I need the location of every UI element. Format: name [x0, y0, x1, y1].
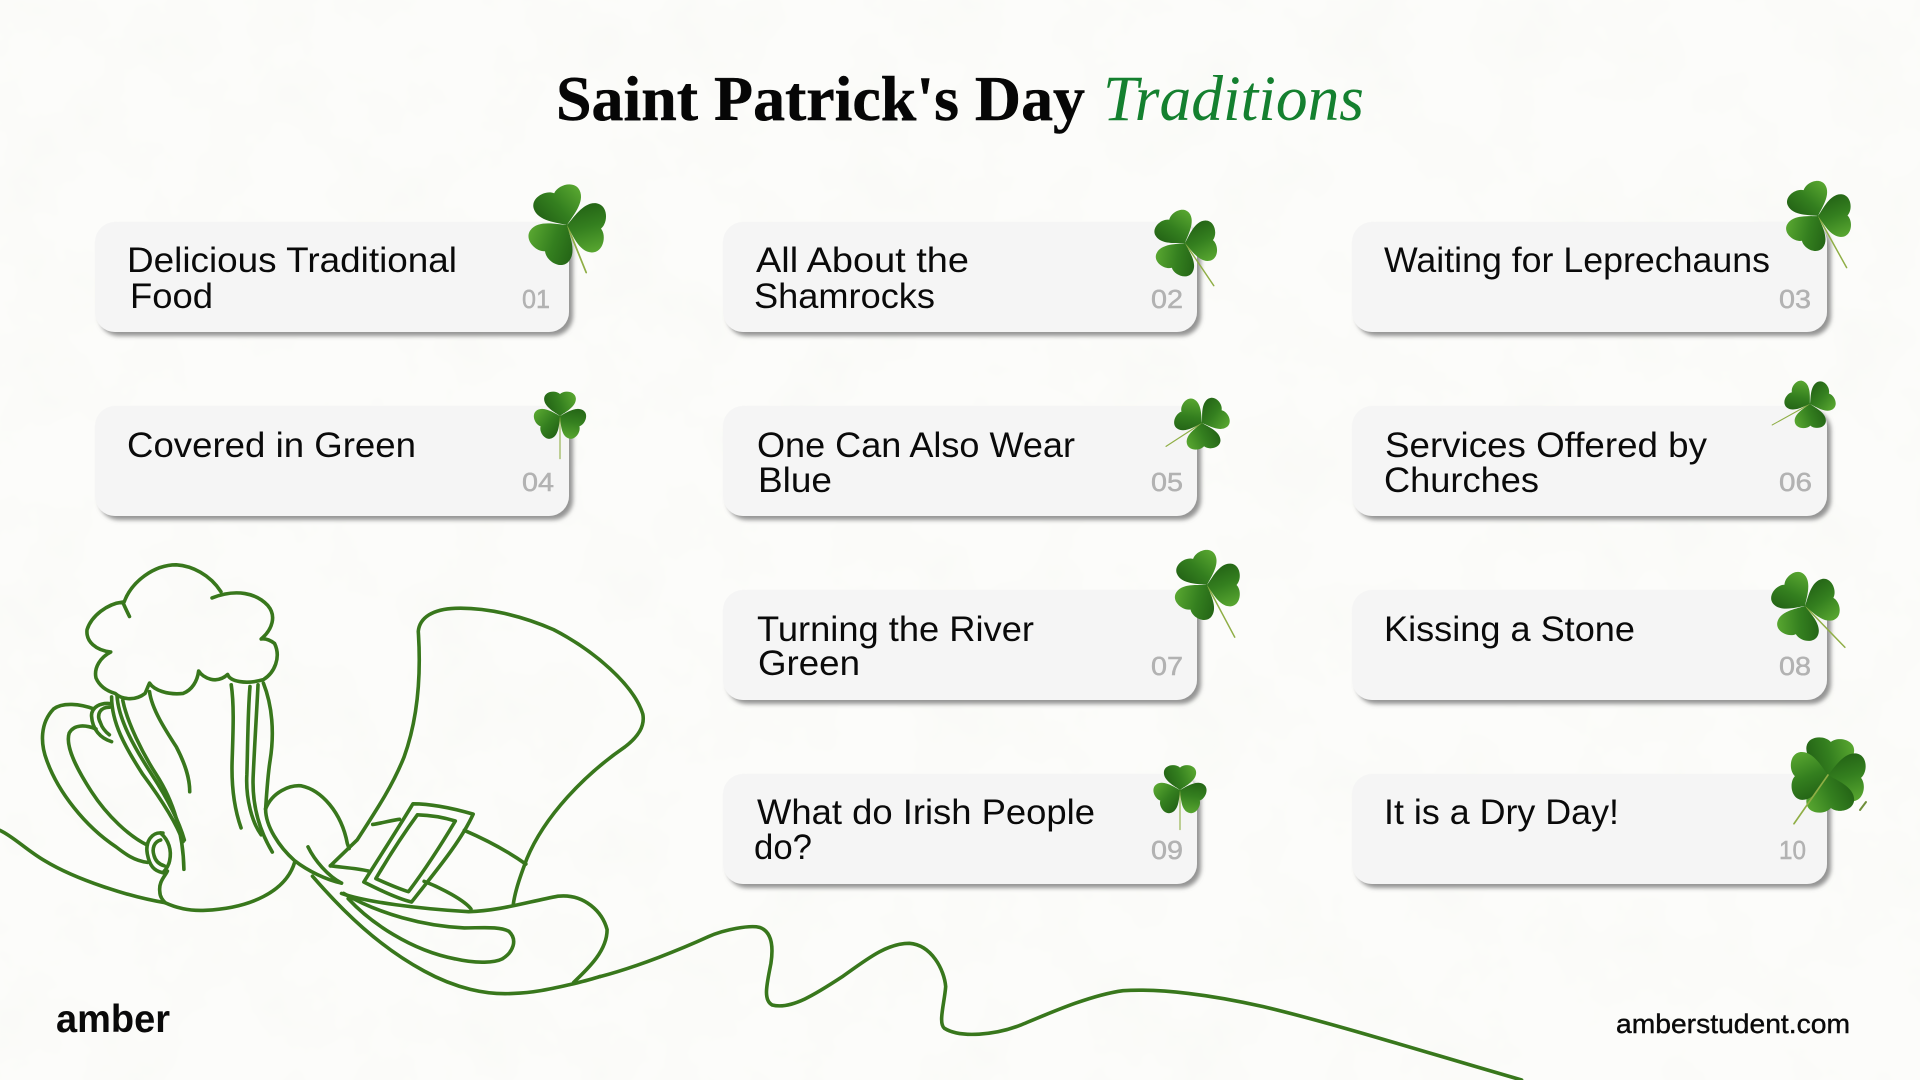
leaf fragment — [1860, 802, 1866, 810]
card 01: Delicious Traditional Food: Food — [130, 277, 213, 316]
card 06: Services Offered by Churches: Services Offered by — [1385, 426, 1708, 465]
card 07: Turning the River Green: 07 — [1151, 651, 1183, 681]
title: Saint Patrick's Day — [556, 64, 1085, 134]
clover 01 — [511, 173, 628, 289]
card 05: One Can Also Wear Blue — [723, 383, 1241, 516]
card 08: Kissing a Stone — [1352, 555, 1873, 700]
card 08: Kissing a Stone: 08 — [1779, 651, 1811, 681]
card 04: Covered in Green: Covered in Green — [127, 426, 416, 465]
card 04: Covered in Green: 04 — [522, 467, 554, 497]
card 07: Turning the River Green: Turning the River — [757, 610, 1034, 649]
card 10: It is a Dry Day! — [1352, 736, 1867, 884]
logo: amber: amber — [56, 998, 170, 1041]
card 09: What do Irish People do?: What do Irish People — [757, 793, 1095, 832]
card 02: All About the Shamrocks: Shamrocks — [754, 277, 935, 316]
card 06: Services Offered by Churches — [1352, 367, 1845, 516]
card 05: One Can Also Wear Blue: One Can Also Wear — [757, 426, 1075, 465]
card 06: Services Offered by Churches: Churches — [1384, 461, 1539, 500]
four-leaf clover 10 — [1790, 736, 1867, 824]
card 10: It is a Dry Day!: It is a Dry Day! — [1384, 793, 1619, 832]
illustration: beer mug and leprechaun hat line art — [0, 565, 643, 994]
wavy line trailing to the bottom edge — [600, 927, 1522, 1080]
website: amberstudent.com — [1616, 1009, 1850, 1039]
card 02: All About the Shamrocks: 02 — [1151, 284, 1183, 314]
card 06: Services Offered by Churches: 06 — [1779, 467, 1812, 497]
card 01: Delicious Traditional Food — [95, 173, 628, 332]
clover 03 — [1768, 168, 1881, 287]
clover 05 — [1149, 383, 1241, 472]
card 03: Waiting for Leprechauns: 03 — [1779, 284, 1811, 314]
clover 09 — [1151, 765, 1209, 830]
title: Traditions — [1103, 63, 1364, 135]
clover 07 — [1157, 538, 1269, 655]
card 09: What do Irish People do?: 09 — [1151, 835, 1183, 865]
card 07: Turning the River Green — [723, 538, 1269, 700]
card 10: It is a Dry Day!: 10 — [1779, 835, 1806, 865]
card 01: Delicious Traditional Food: 01 — [522, 284, 550, 314]
card 02: All About the Shamrocks — [723, 196, 1245, 332]
clover 04 — [531, 392, 589, 459]
card 08: Kissing a Stone: Kissing a Stone — [1384, 610, 1635, 649]
card 05: One Can Also Wear Blue: 05 — [1151, 467, 1183, 497]
card 07: Turning the River Green: Green — [758, 644, 860, 683]
card 02: All About the Shamrocks: All About the — [756, 241, 969, 280]
clover 02 — [1137, 196, 1245, 306]
card 05: One Can Also Wear Blue: Blue — [758, 461, 832, 500]
card 04: Covered in Green — [95, 392, 589, 516]
card 09: What do Irish People do? — [723, 765, 1209, 884]
clover 06 — [1758, 367, 1845, 450]
title — [556, 63, 1364, 135]
clover 08 — [1754, 555, 1873, 674]
card 03: Waiting for Leprechauns — [1352, 168, 1881, 332]
card 01: Delicious Traditional Food: Delicious Traditional — [127, 241, 457, 280]
card 03: Waiting for Leprechauns: Waiting for Leprechauns — [1384, 241, 1770, 280]
card 09: What do Irish People do?: do? — [754, 828, 812, 867]
